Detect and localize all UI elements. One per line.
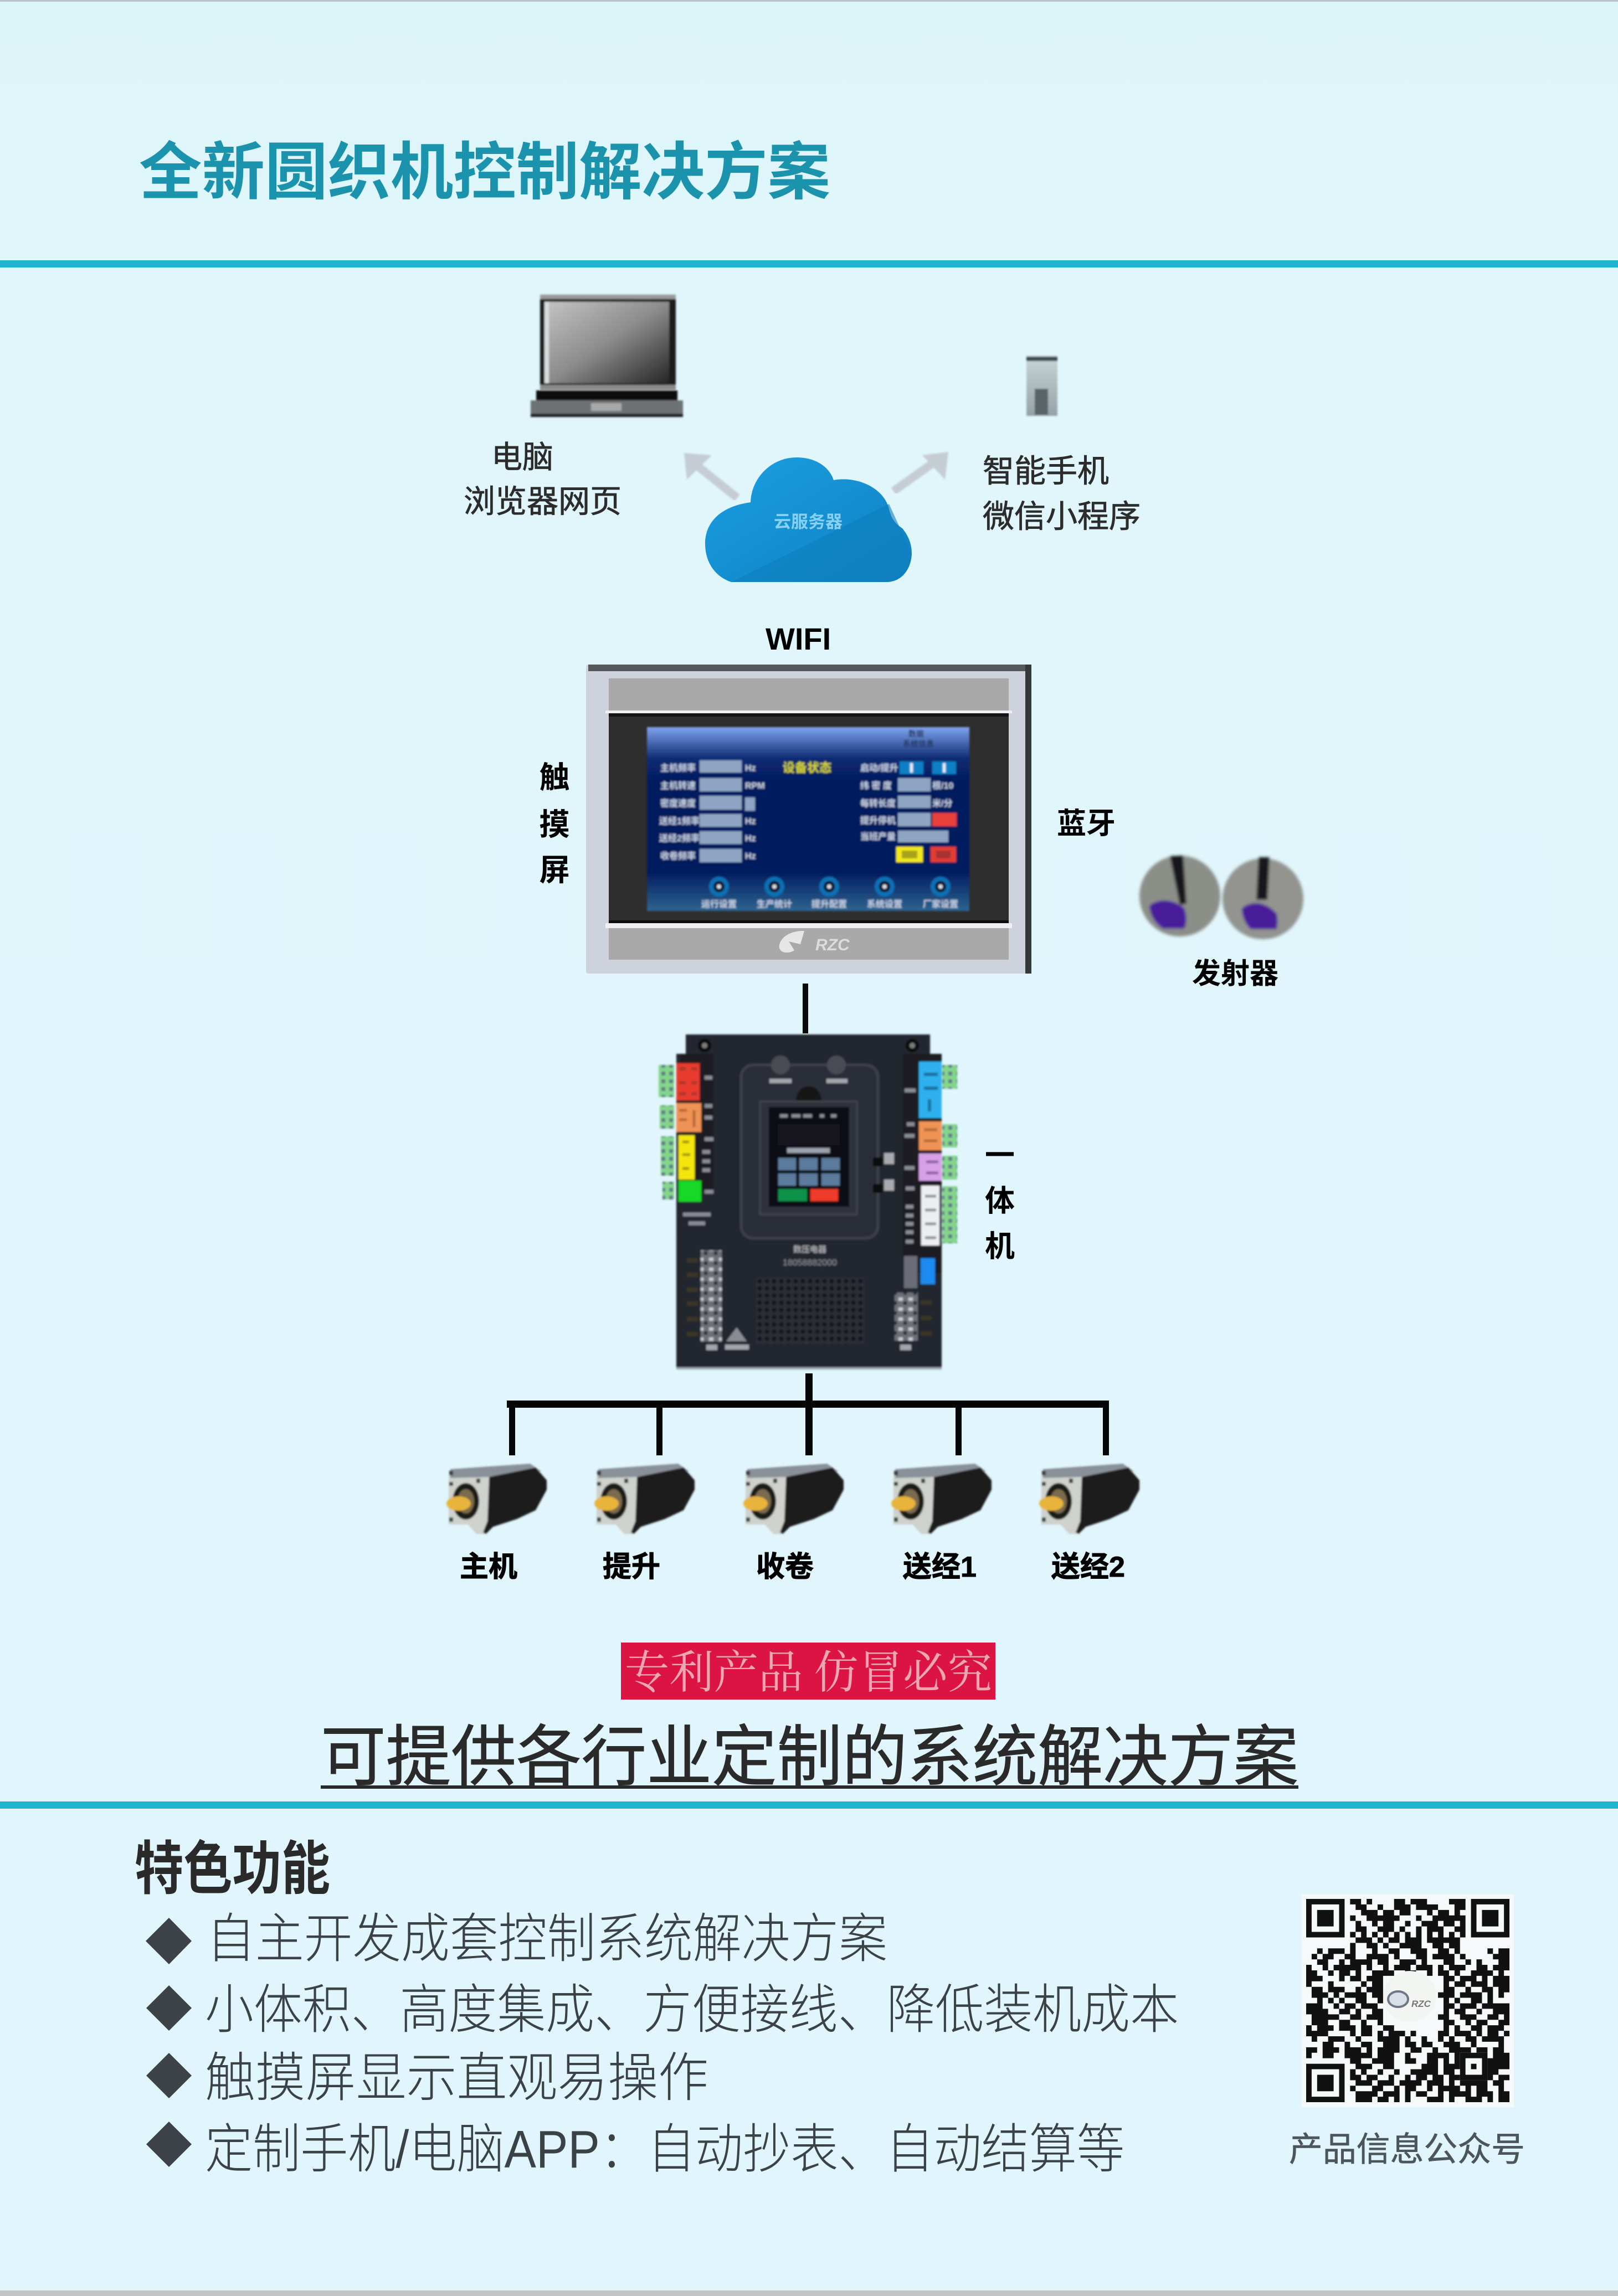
right coloured connectors [919, 1062, 942, 1284]
feature 4: 定制手机/电脑APP：自动抄表、自动结算等 [205, 2120, 1124, 2179]
label: transmitter: 发射器 [1192, 958, 1278, 990]
controller board [659, 1034, 957, 1370]
subheading: 可提供各行业定制的系统解决方案 [321, 1720, 1298, 1794]
RZC logo: RZC [815, 936, 850, 954]
left terminals [659, 1065, 674, 1200]
lower terminals [692, 1250, 926, 1350]
motor: main [446, 1464, 547, 1534]
screen display: 密度速度 [660, 798, 696, 809]
feature 3: 触摸屏显示直观易操作 [205, 2048, 708, 2108]
screen display: 运行设置 [701, 899, 737, 909]
motor: warp 1 [891, 1464, 992, 1534]
screen display: 根/10 [932, 781, 953, 791]
screen display: 提升停机 [860, 815, 896, 826]
motor labels [460, 1551, 1125, 1583]
motor: lift [594, 1464, 695, 1534]
screen display: 厂家设置 [923, 899, 958, 909]
board brand and phone: 数压电器 [793, 1245, 826, 1254]
screen display: 提升配置 [811, 899, 847, 909]
board brand and phone [783, 1245, 837, 1268]
patent banner: 专利产品 仿冒必究 [625, 1648, 992, 1698]
RZC logo [779, 931, 850, 954]
motor labels: 收卷 [756, 1551, 814, 1583]
screen display: 主机频率 [660, 763, 696, 773]
screen display: 系统设置 [867, 899, 902, 909]
label: computer browser: 电脑 [491, 440, 553, 475]
feature 2: 小体积、高度集成、方便接线、降低装机成本 [205, 1980, 1179, 2040]
screen display: Hz [745, 817, 756, 826]
screen display: Hz [745, 834, 756, 843]
label: integrated controller [985, 1139, 1015, 1263]
keypad module [741, 1056, 894, 1238]
top teal divider [0, 260, 1618, 267]
lower teal divider [0, 1801, 1618, 1809]
left coloured connectors [676, 1063, 701, 1202]
screen display: 主机转速 [660, 780, 696, 791]
screen display: 设备状态 [783, 761, 831, 775]
screen display: Hz [745, 764, 756, 773]
screen display: RPM [745, 781, 765, 791]
motor: winding [743, 1464, 844, 1534]
label: integrated controller: 体 [985, 1185, 1015, 1218]
QR code: RZC [1411, 1999, 1431, 2009]
arrow: cloud to computer [684, 453, 737, 498]
touchscreen panel [586, 665, 1031, 974]
connector: screen to controller [803, 984, 808, 1033]
screen display: 送经1频率 [659, 816, 700, 826]
small side labels [683, 1078, 916, 1242]
icon: laptop [531, 295, 683, 417]
icon: transmitters [1139, 856, 1303, 939]
icon: cloud server [705, 457, 912, 582]
motor labels: 送经2 [1051, 1551, 1125, 1583]
label: smartphone mini program: 智能手机 [983, 454, 1109, 489]
wiring bus to motors [507, 1373, 1109, 1455]
heading: features: 特色功能 [135, 1837, 330, 1902]
screen display: 收卷频率 [660, 851, 696, 861]
screen display: Hz [745, 852, 756, 861]
label: touchscreen [539, 760, 570, 887]
label: integrated controller: 一 [985, 1139, 1015, 1172]
screen display [647, 727, 969, 911]
label: integrated controller: 机 [985, 1230, 1015, 1263]
label: smartphone mini program [983, 454, 1141, 534]
label: computer browser [464, 440, 621, 519]
screen display: 生产统计 [757, 899, 792, 909]
label: smartphone mini program: 微信小程序 [983, 499, 1141, 534]
label: computer browser: 浏览器网页 [464, 484, 621, 519]
feature 1: 自主开发成套控制系统解决方案 [207, 1909, 887, 1969]
screen display: 每转长度 [860, 798, 896, 809]
screen display: 送经2频率 [659, 833, 700, 843]
feature list [146, 1909, 1179, 2179]
title: 全新圆织机控制解决方案 [139, 137, 830, 207]
screen display: 米/分 [932, 799, 952, 809]
board brand and phone: 18058882000 [783, 1258, 837, 1268]
screen display: 系统信息 [903, 739, 934, 748]
right terminals [942, 1065, 957, 1243]
screen display: 数据 [908, 729, 924, 738]
arrow: cloud to phone [893, 452, 948, 491]
icon: cloud server: 云服务器 [774, 512, 843, 532]
label: bluetooth: 蓝牙 [1057, 807, 1116, 840]
label: touchscreen: 摸 [539, 807, 570, 842]
icon: smartphone [1026, 356, 1057, 416]
QR code [1302, 1895, 1514, 2107]
motor labels: 提升 [603, 1551, 660, 1583]
motor: warp 2 [1039, 1464, 1139, 1534]
label: WIFI: WIFI [766, 621, 831, 656]
label: QR caption: 产品信息公众号 [1289, 2130, 1525, 2168]
motor labels: 主机 [460, 1551, 517, 1583]
screen display: 启动/提升 [860, 763, 898, 773]
screen display: 当班产量 [860, 832, 896, 842]
label: touchscreen: 屏 [539, 853, 570, 887]
screen display: 纬 密 度 [860, 780, 892, 791]
motor labels: 送经1 [903, 1551, 977, 1583]
speaker grille [756, 1278, 864, 1345]
label: touchscreen: 触 [539, 760, 570, 795]
